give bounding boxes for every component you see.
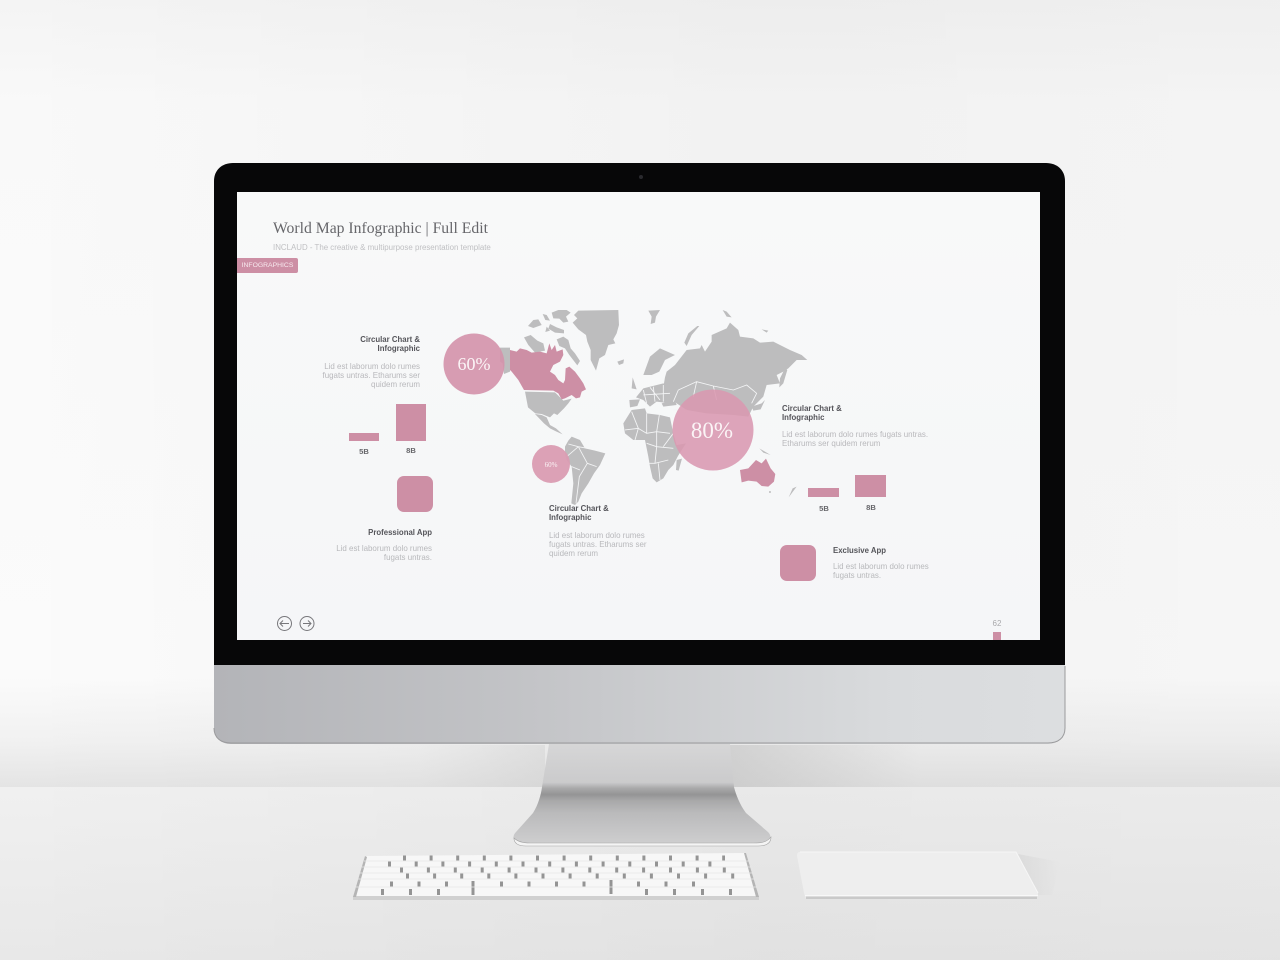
heading: Infographic xyxy=(782,413,824,422)
Scandinavia xyxy=(643,348,675,375)
heading xyxy=(549,504,609,522)
heading: Infographic xyxy=(378,344,420,353)
Central Europe xyxy=(636,383,678,407)
keyboard key gaps xyxy=(381,858,736,895)
body: fugats untras. Etharums ser xyxy=(322,371,420,380)
body: Lid est laborum dolo rumes xyxy=(833,562,929,571)
Arctic islands xyxy=(552,310,571,323)
label 5B: 5B xyxy=(359,447,369,456)
Turkey xyxy=(662,400,677,407)
label 5B: 5B xyxy=(819,504,829,513)
circle: small 60%: 60% xyxy=(545,461,558,469)
icon tile: exclusive app xyxy=(780,545,816,581)
Africa xyxy=(623,408,686,482)
text block: right xyxy=(782,404,928,448)
South America xyxy=(565,437,605,505)
USA xyxy=(525,392,572,417)
camera xyxy=(639,175,643,179)
icon tile: professional app xyxy=(397,476,433,512)
body xyxy=(833,562,929,580)
tag: infographics xyxy=(237,258,298,273)
text block: bottom centre xyxy=(549,504,646,558)
arrow: previous xyxy=(278,616,292,630)
body: fugats untras. xyxy=(833,571,881,580)
bar 5B xyxy=(808,488,839,497)
arrow: next xyxy=(300,616,314,630)
body xyxy=(549,531,646,558)
heading: Infographic xyxy=(549,513,591,522)
bar 5B xyxy=(349,433,379,441)
body: quidem rerum xyxy=(371,380,420,389)
bars: right xyxy=(808,475,886,513)
bars: left xyxy=(349,404,426,456)
body: Lid est laborum dolo rumes xyxy=(549,531,645,540)
body: fugats untras. Etharums ser xyxy=(549,540,646,549)
body: quidem rerum xyxy=(549,549,598,558)
bar 8B xyxy=(396,404,426,441)
monitor black bezel xyxy=(214,163,1065,665)
heading: Circular Chart & xyxy=(360,335,420,344)
heading: Circular Chart & xyxy=(782,404,842,412)
Far East islands xyxy=(723,310,732,317)
Greenland xyxy=(573,310,619,371)
Central America xyxy=(535,414,563,434)
page marker xyxy=(993,632,1001,640)
tag: infographics: INFOGRAPHICS xyxy=(242,262,293,269)
text block: top left xyxy=(322,335,420,389)
heading: Circular Chart & xyxy=(549,504,609,513)
white country borders xyxy=(567,382,757,503)
body: fugats untras. xyxy=(384,553,432,562)
title: World Map Infographic | Full Edit xyxy=(273,220,488,236)
body xyxy=(336,544,432,562)
Russia and Asia xyxy=(663,323,807,417)
bar 8B xyxy=(855,475,886,497)
label 8B: 8B xyxy=(406,446,416,455)
heading: Professional App xyxy=(368,528,432,537)
Alaska stub xyxy=(500,348,510,374)
grey continents xyxy=(500,310,807,505)
screen xyxy=(237,192,1040,640)
heading xyxy=(360,335,420,353)
body: Lid est laborum dolo rumes xyxy=(336,544,432,553)
highlighted countries: Canada and Australia xyxy=(510,343,775,487)
circle: 60%: 60% xyxy=(458,354,490,374)
keyboard row lines xyxy=(356,861,757,887)
text block: professional app xyxy=(336,528,432,562)
body xyxy=(782,430,928,448)
body: Lid est laborum dolo rumes xyxy=(324,362,420,371)
monitor silver chin xyxy=(214,665,1065,744)
label 8B: 8B xyxy=(866,503,876,512)
Spain xyxy=(629,399,640,407)
body: Lid est laborum dolo rumes fugats untras. xyxy=(782,430,928,439)
circle: 80%: 80% xyxy=(691,418,733,443)
heading xyxy=(782,404,842,422)
UK xyxy=(632,377,637,389)
page number: 62 xyxy=(993,618,1001,628)
heading: Exclusive App xyxy=(833,546,886,555)
Pacific islands xyxy=(759,448,771,455)
subtitle: INCLAUD - The creative & multipurpose presentation template xyxy=(273,242,491,252)
text block: exclusive app xyxy=(833,546,929,580)
body: Etharums ser quidem rerum xyxy=(782,439,880,448)
body xyxy=(322,362,420,389)
